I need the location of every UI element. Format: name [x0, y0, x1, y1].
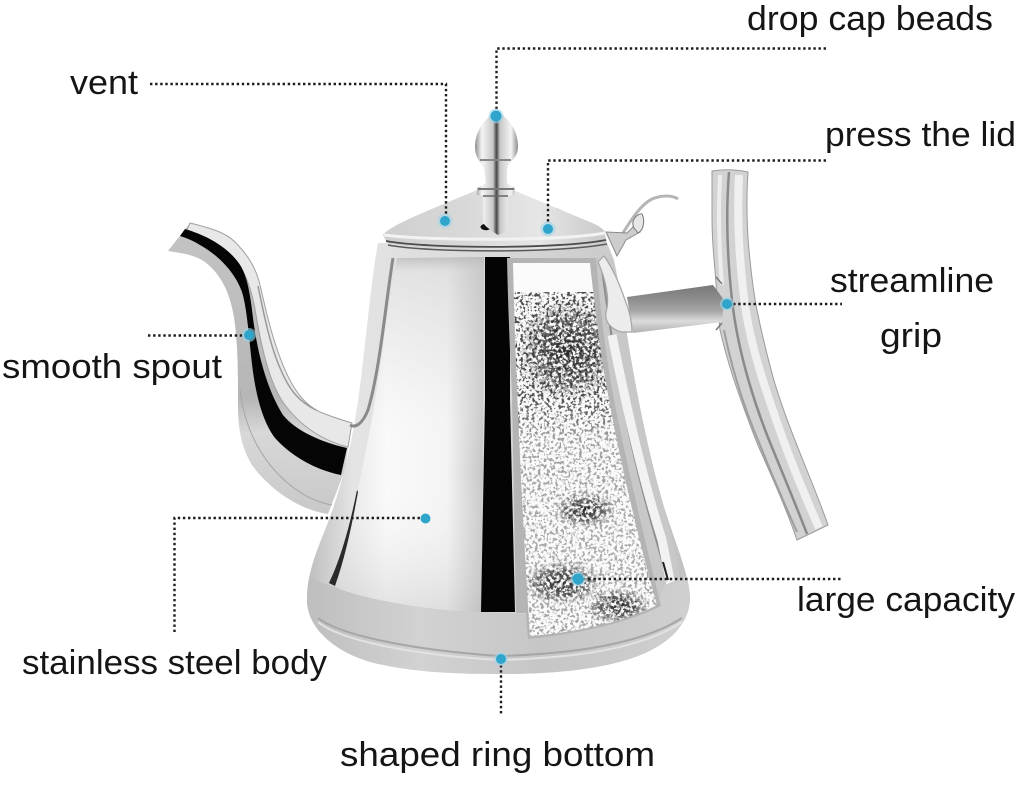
- bubbles: [514, 292, 657, 636]
- lid: [383, 190, 607, 251]
- callout: streamline grip: [720, 262, 994, 355]
- callout: streamline grip: grip: [880, 317, 942, 355]
- callout: press the lid: press the lid: [825, 116, 1016, 154]
- spout: [168, 223, 352, 514]
- callout: shaped ring bottom: [340, 652, 655, 774]
- callout: drop cap beads: drop cap beads: [747, 0, 993, 38]
- callout: large capacity: large capacity: [797, 581, 1015, 619]
- base ring: [307, 576, 690, 674]
- callout: vent: vent: [70, 64, 139, 102]
- callout: stainless steel body: [22, 514, 430, 682]
- callout: shaped ring bottom: shaped ring bottom: [340, 736, 655, 774]
- lid lever: [556, 196, 678, 256]
- water window: [505, 258, 665, 642]
- callout: large capacity: [570, 572, 1015, 619]
- lid knob: [475, 112, 518, 235]
- callout: smooth spout: smooth spout: [2, 348, 223, 386]
- teapot body: [300, 243, 700, 680]
- spout black reflection: [180, 229, 347, 475]
- callout: stainless steel body: stainless steel body: [22, 644, 327, 682]
- callout: drop cap beads: [488, 0, 993, 124]
- left inner panel: [335, 257, 484, 612]
- black reflection stripe: [481, 257, 515, 612]
- handle stem: [627, 285, 724, 333]
- callout: press the lid: [540, 116, 1016, 236]
- callout: streamline grip: streamline: [830, 262, 994, 300]
- handle: [712, 170, 828, 540]
- right body bands: [626, 333, 637, 391]
- callout: vent: [70, 64, 452, 228]
- stem collar at body: [598, 256, 722, 332]
- callout: smooth spout: [2, 328, 256, 386]
